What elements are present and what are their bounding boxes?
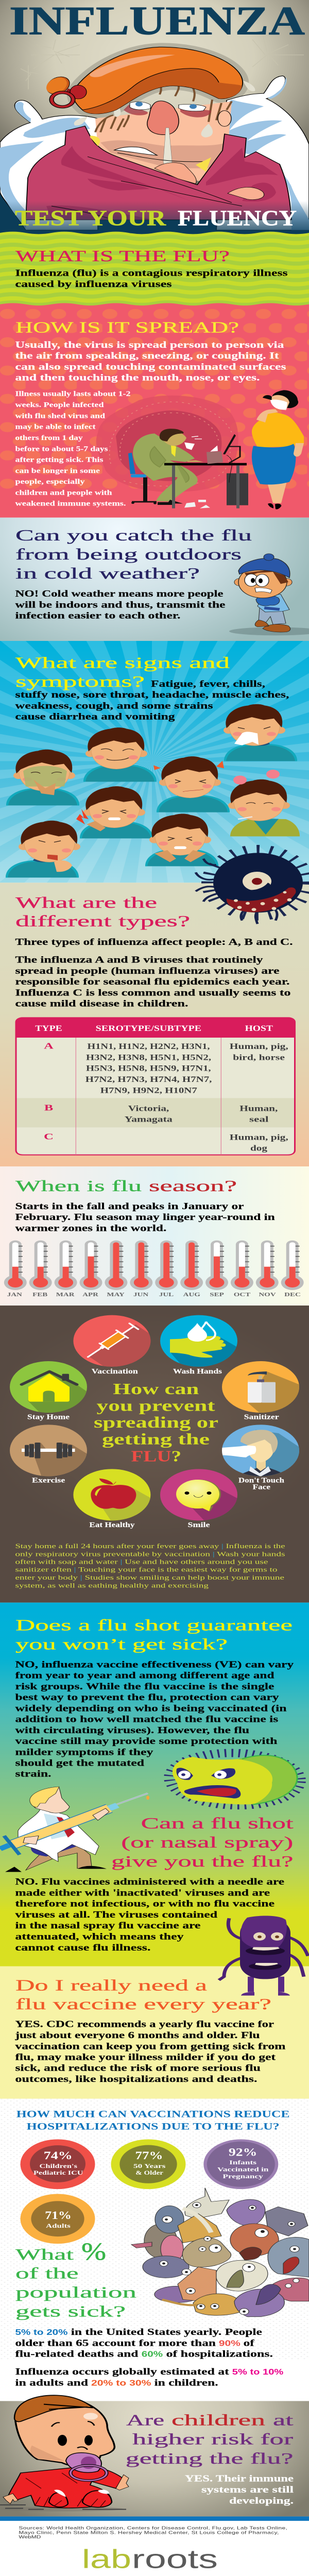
text block: 20% to 30% [91, 2379, 151, 2387]
heading: HOW IS IT SPREAD? [15, 319, 239, 336]
row C [44, 1131, 288, 1153]
row A: Human, pig, [230, 1042, 288, 1051]
text block: weakness, cough, and some strains [15, 701, 213, 710]
text block: in adults and [15, 2378, 89, 2387]
text block: Three types of influenza affect people: A, B and C. [15, 937, 293, 947]
month labels: JUL [159, 1292, 174, 1297]
month labels: FEB [32, 1292, 48, 1297]
table header: TYPE [35, 1024, 62, 1033]
sources: Sources: World Health Organization, Centers for Disease Control, Flu.gov, Lab Tests Online, [19, 2526, 287, 2531]
text block: systems are still [201, 2484, 294, 2495]
text block: NO. Flu vaccines administered with a needle are [15, 1876, 284, 1887]
label: Don't Touch [238, 1476, 284, 1484]
heading [94, 1380, 218, 1465]
text block: NO! Cold weather means more people [15, 588, 223, 599]
text block [15, 1201, 275, 1233]
illustration: shivering boy [229, 554, 309, 635]
text block: stuffy nose, sore throat, headache, muscle aches, [15, 690, 289, 700]
stat: 74% [21, 2139, 95, 2189]
heading [15, 1977, 271, 2013]
label: Eat Healthy [89, 1520, 135, 1529]
month labels: NOV [259, 1292, 277, 1297]
stat: 77%: & Older [135, 2170, 163, 2176]
heading: % [81, 2238, 106, 2265]
icon: eat healthy [73, 1469, 150, 1521]
label: Sanitizer [244, 1413, 279, 1421]
text block: February. Flu season may linger year-round in [15, 1212, 275, 1222]
text block: flu, may make your illness milder if you do get [15, 2052, 276, 2062]
text block: can be longer in some [15, 466, 100, 474]
heading: higher risk for [132, 2431, 293, 2448]
month labels: MAR [56, 1292, 75, 1297]
text block: developing. [229, 2496, 294, 2505]
heading [15, 1177, 237, 1195]
heading [15, 1617, 293, 1653]
row B: Human, [239, 1104, 278, 1113]
text block: 60% [142, 2350, 163, 2359]
label [238, 1476, 284, 1491]
text block [15, 2366, 283, 2387]
text block: of [244, 2338, 254, 2348]
text block: should get the mutated [15, 1758, 145, 1768]
stat: 74%: Pediatric ICU [33, 2170, 83, 2176]
text block: often with soap and water | Use and have others around you use [15, 1558, 268, 1566]
icon: exercise [10, 1425, 87, 1477]
month labels: OCT [234, 1292, 251, 1297]
heading: What are signs and [15, 654, 230, 672]
panel: how is it spread [15, 319, 304, 509]
text block: before to about 5-7 days [15, 445, 108, 452]
logo: roots [132, 2545, 218, 2574]
panel: different types [0, 849, 309, 1166]
text block: widely depending on who is being vaccinated (in [15, 1703, 287, 1713]
text block: Fatigue, fever, chills, [151, 679, 265, 689]
icon: don't touch face [222, 1425, 299, 1477]
text block: older than 65 account for more than [15, 2338, 216, 2348]
panel: hospitalization and population stats [0, 2099, 309, 2576]
text block [15, 340, 286, 383]
text block: people, especially [15, 478, 85, 485]
panel: how is it spread background [0, 299, 309, 518]
heading: What are the [15, 894, 157, 911]
stat: 77% [111, 2139, 185, 2189]
illustration: sick man at desk [128, 429, 248, 509]
stat: 92%: 92% [229, 2146, 257, 2159]
heading: How can [113, 1380, 199, 1398]
label: Stay Home [27, 1413, 70, 1421]
text block: in children. [154, 2378, 218, 2387]
logo: lab [82, 2545, 131, 2574]
panel: header [0, 0, 309, 237]
label: Wash Hands [173, 1367, 222, 1375]
row A: H7N2, H7N3, H7N4, H7N7, [85, 1075, 212, 1084]
text block: cannot cause flu illness. [15, 1942, 150, 1953]
text block: system, as well as eathing healthy and exercising [15, 1582, 209, 1589]
heading [111, 1815, 294, 1870]
heading: (or nasal spray) [121, 1834, 293, 1851]
heading: in cold weather? [15, 565, 200, 582]
text block: weakened immune systems. [15, 499, 126, 507]
text block: after getting sick. This [15, 455, 104, 464]
heading: of the [15, 2265, 78, 2282]
germ cloud [96, 396, 238, 492]
heading: children [171, 2412, 265, 2429]
month labels: APR [82, 1292, 99, 1297]
text block: just about everyone 6 months and older. Flu [14, 2030, 260, 2040]
row A: H1N1, H1N2, H2N2, H3N1, [88, 1042, 210, 1051]
row C: dog [250, 1144, 267, 1153]
text block: Illness usually lasts about 1-2 [15, 389, 130, 398]
heading: gets sick? [15, 2303, 126, 2320]
stat: 77%: 77% [135, 2149, 163, 2162]
text block: weeks. People infected [15, 400, 104, 409]
text block: of hospitalizations. [166, 2349, 273, 2359]
text block: in the nasal spray flu vaccine are [15, 1920, 200, 1930]
icon: coughing boy [6, 821, 80, 877]
text block: made either with 'inactivated' viruses and are [15, 1888, 270, 1897]
month labels [7, 1292, 301, 1297]
text block: best way to prevent the flu, protection can vary [15, 1692, 279, 1702]
text block: addition to how well matched the flu vaccine is [15, 1714, 279, 1724]
text block [15, 1659, 294, 1779]
icon: sore throat boy [145, 814, 218, 866]
stat: 71%: Adults [46, 2223, 71, 2229]
text block: cause diarrhea and vomiting [15, 711, 175, 722]
heading: at [273, 2412, 294, 2429]
icon: vaccination [73, 1315, 150, 1367]
heading: FLU? [131, 1448, 181, 1465]
row B: B [44, 1103, 53, 1113]
row B: Victoria, [128, 1104, 169, 1113]
stat: 71%: 71% [45, 2209, 72, 2222]
subtitle [15, 206, 297, 230]
text block: will be indoors and thus, transmit the [15, 600, 225, 609]
illustration: doctor with syringe [0, 1787, 149, 1872]
text block [15, 588, 225, 621]
month labels: DEC [284, 1292, 301, 1297]
icon: sanitizer [222, 1361, 299, 1413]
label: Smile [187, 1520, 210, 1529]
icon: headache boy [153, 756, 230, 812]
heading: you prevent [97, 1397, 215, 1414]
stat: 71% [21, 2194, 95, 2244]
text block [15, 2327, 273, 2359]
text block: cause mild disease in children. [15, 998, 188, 1009]
row A: H3N2, H3N8, H5N1, H5N2, [86, 1053, 211, 1062]
text block: vaccination can keep you from getting sick from [15, 2041, 286, 2051]
heading: population [15, 2284, 136, 2301]
chart: monthly thermometers [4, 1241, 304, 1297]
panel: flu season [0, 1166, 309, 1306]
icon: neck pain boy [76, 786, 153, 838]
heading: season? [149, 1177, 237, 1195]
text block: attenuated, which means they [15, 1931, 184, 1942]
table header [35, 1024, 273, 1033]
text block: children and people with [15, 488, 112, 496]
heading: HOSPITALIZATIONS DUE TO THE FLU? [27, 2122, 280, 2132]
text block [185, 2473, 294, 2505]
text block: outcomes, like hospitalizations and deaths. [15, 2074, 257, 2084]
heading: WHAT IS THE FLU? [15, 247, 230, 265]
row C: C [44, 1131, 54, 1141]
text block [15, 268, 288, 289]
text block: flu-related deaths and [15, 2349, 139, 2359]
heading [126, 2412, 294, 2467]
heading: flu vaccine every year? [15, 1995, 271, 2013]
panel: cold weather [0, 518, 309, 641]
stat: 92%: Infants [229, 2159, 256, 2166]
text block: from year to year and among different age and [15, 1670, 274, 1681]
text block: Influenza (flu) is a contagious respiratory illness [15, 268, 288, 278]
heading [15, 527, 252, 582]
text block: can also spread touching contaminated surfaces [15, 362, 286, 371]
heading [15, 2238, 136, 2320]
stat: 77%: 50 Years [133, 2163, 165, 2170]
text block: Influenza occurs globally estimated at [15, 2366, 229, 2377]
text block: warmer zones in the world. [15, 1223, 166, 1233]
text block: sanitizer often | Touching your face is the easiest way for germs to [15, 1566, 277, 1573]
illustration: purple monster [219, 1916, 308, 1995]
label: Vaccination [92, 1367, 138, 1375]
text block: 5% to 10% [232, 2368, 283, 2377]
panel: prevention [0, 1306, 309, 1603]
text block: 5% to 20% [15, 2328, 67, 2337]
panel: signs and symptoms [0, 641, 309, 883]
panel: children at higher risk [0, 2395, 309, 2521]
text block [15, 389, 130, 507]
row A: A [44, 1041, 54, 1050]
text block: sick, and reduce the risk of more serious flu [15, 2063, 261, 2073]
text block: in the United States yearly. People [71, 2327, 262, 2337]
heading: HOW MUCH CAN VACCINATIONS REDUCE [16, 2109, 290, 2120]
text block: NO, influenza vaccine effectiveness (VE) can vary [15, 1659, 294, 1669]
text block: infection easier to each other. [15, 611, 180, 621]
text block [14, 2019, 286, 2084]
illustration: woman with mask [252, 390, 304, 509]
heading: different types? [15, 913, 190, 930]
icon: stay home [10, 1361, 87, 1413]
logo [82, 2545, 218, 2574]
icon: tired boy [83, 727, 157, 782]
illustration: sick man in bed [0, 47, 309, 230]
month labels: SEP [210, 1292, 224, 1297]
table header: HOST [245, 1024, 273, 1033]
text block: only respiratory virus preventable by vaccination | Wash your hands [15, 1550, 285, 1557]
stat: 92%: Pregnancy [222, 2173, 263, 2180]
heading [15, 654, 230, 690]
text block: with flu shed virus and [15, 412, 105, 419]
row A: bird, horse [233, 1053, 285, 1062]
text block: others from 1 day [15, 433, 83, 442]
text block: and then touching the mouth, nose, or eyes. [15, 372, 260, 383]
month labels: AUG [183, 1292, 200, 1297]
text block: viruses at all. The viruses contained [15, 1909, 218, 1920]
text block: therefore not infectious, or with no flu vaccine [15, 1899, 274, 1909]
heading: spreading or [94, 1414, 218, 1431]
text block: YES. Their immune [185, 2473, 294, 2484]
row A: H7N9, H9N2, H10N7 [100, 1086, 197, 1095]
heading: When is flu [15, 1177, 142, 1195]
text block: risk groups. While the flu vaccine is the single [15, 1681, 274, 1691]
month labels: JUN [133, 1292, 149, 1297]
row C: Human, pig, [230, 1133, 288, 1142]
heading: from being outdoors [15, 546, 242, 563]
text block: Starts in the fall and peaks in January or [15, 1201, 244, 1211]
month labels: MAY [107, 1292, 125, 1297]
text block: milder symptoms if they [15, 1747, 153, 1757]
icon: smile [160, 1469, 237, 1521]
text block: Usually, the virus is spread person to person via [15, 340, 284, 350]
heading: Does a flu shot guarantee [15, 1617, 293, 1634]
sources: Mayo Clinic, Penn State Milton S. Hershey Medical Center, St Louis College of Pharmacy, [19, 2531, 279, 2535]
text block: The influenza A and B viruses that routinely [15, 955, 263, 965]
heading: Are [126, 2412, 164, 2429]
stat: 92% [203, 2139, 278, 2189]
heading: give you the flu? [111, 1853, 293, 1870]
panel: flu shot guarantee [0, 1603, 309, 1967]
subtitle: TEST YOUR [15, 206, 166, 230]
icon: sneezing boy [224, 704, 297, 761]
table: influenza types [15, 1017, 296, 1156]
text block [15, 937, 293, 1009]
label: Exercise [32, 1476, 65, 1484]
heading: What [15, 2246, 74, 2263]
icon: nauseous boy [6, 750, 79, 805]
heading [16, 2109, 290, 2132]
text block [15, 679, 289, 722]
stat: 74%: Children's [39, 2163, 77, 2170]
table header: SEROTYPE/SUBTYPE [96, 1024, 201, 1033]
illustration: baby with pacifier [0, 2395, 129, 2512]
text block: strain. [15, 1769, 51, 1779]
row A [44, 1041, 288, 1095]
heading [15, 894, 190, 930]
text block: Influenza C is less common and usually seems to [15, 988, 290, 997]
illustration: dark virus [196, 849, 308, 924]
text block: enter your body | Studies show smiling can help boost your immune [15, 1573, 284, 1581]
text block: vaccine still may provide some protection with [15, 1736, 278, 1746]
heading: you won’t get sick? [15, 1636, 228, 1653]
icon: wash hands [160, 1315, 237, 1367]
stat: 74%: 74% [44, 2149, 73, 2162]
text block: Stay home a full 24 hours after your fever goes away | Influenza is the [15, 1542, 285, 1550]
heading: Do I really need a [15, 1977, 207, 1994]
stat: 92%: Vaccinated in [217, 2166, 269, 2173]
panel: yearly vaccine [0, 1916, 309, 2099]
text block: the air from speaking, sneezing, or coughing. It [15, 351, 279, 361]
row B: seal [249, 1115, 269, 1124]
row A: H5N3, H5N8, H5N9, H7N1, [86, 1064, 211, 1073]
row B: Yamagata [125, 1115, 173, 1124]
heading: getting the [102, 1431, 210, 1448]
text block: with circulating viruses). However, the flu [15, 1725, 249, 1735]
sources [19, 2526, 287, 2539]
text block [15, 1542, 285, 1589]
month labels: JAN [7, 1292, 23, 1297]
heading: Can a flu shot [141, 1815, 294, 1832]
row B [44, 1103, 278, 1124]
text block: responsible for seasonal flu epidemics each year. [15, 976, 289, 987]
sources: WebMD [19, 2535, 41, 2539]
text block [15, 1876, 284, 1953]
heading: getting the flu? [126, 2450, 293, 2467]
illustration: angry green virus [168, 1751, 302, 1807]
label: Face [253, 1483, 270, 1491]
text block: may be able to infect [15, 422, 96, 431]
text block: spread in people (human influenza viruses) are [15, 965, 279, 976]
text block: YES. CDC recommends a yearly flu vaccine for [15, 2019, 274, 2029]
icon: feverish boy [228, 770, 300, 836]
text block: caused by influenza viruses [15, 279, 172, 289]
heading: symptoms? [15, 673, 145, 690]
panel: what is the flu [0, 232, 309, 306]
illustration: monster pile [131, 2188, 309, 2317]
text block: 90% [219, 2339, 241, 2348]
heading: Can you catch the flu [15, 527, 252, 544]
